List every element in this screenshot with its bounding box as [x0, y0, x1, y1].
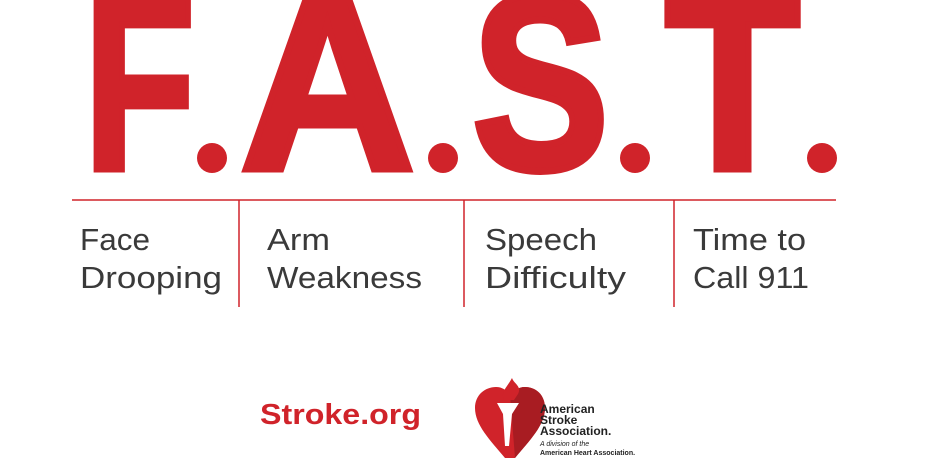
label: face [80, 222, 222, 295]
title dots [197, 143, 837, 173]
label: time: Call 911 [693, 260, 809, 295]
label: arm [267, 222, 422, 295]
label: arm: Weakness [267, 260, 422, 295]
label: speech [485, 222, 627, 295]
label: time: Time to [693, 222, 806, 257]
logo text: Association. [540, 424, 611, 438]
logo: American Stroke Association [475, 378, 635, 458]
icon: heart with torch [475, 378, 545, 458]
label: arm: Arm [267, 222, 330, 257]
label: face: Drooping [80, 260, 222, 295]
label: time [693, 222, 809, 295]
title: F.A.S.T. [84, 0, 800, 222]
logo text: American Heart Association. [540, 450, 635, 457]
logo text: American [540, 402, 595, 416]
label: face: Face [80, 222, 150, 257]
logo text: A division of the [539, 441, 589, 448]
website: Stroke.org [260, 399, 421, 431]
label: speech: Difficulty [485, 260, 627, 295]
label: speech: Speech [485, 222, 597, 257]
labels [80, 222, 809, 295]
logo text: Stroke [540, 413, 578, 427]
divider lines [72, 200, 836, 307]
